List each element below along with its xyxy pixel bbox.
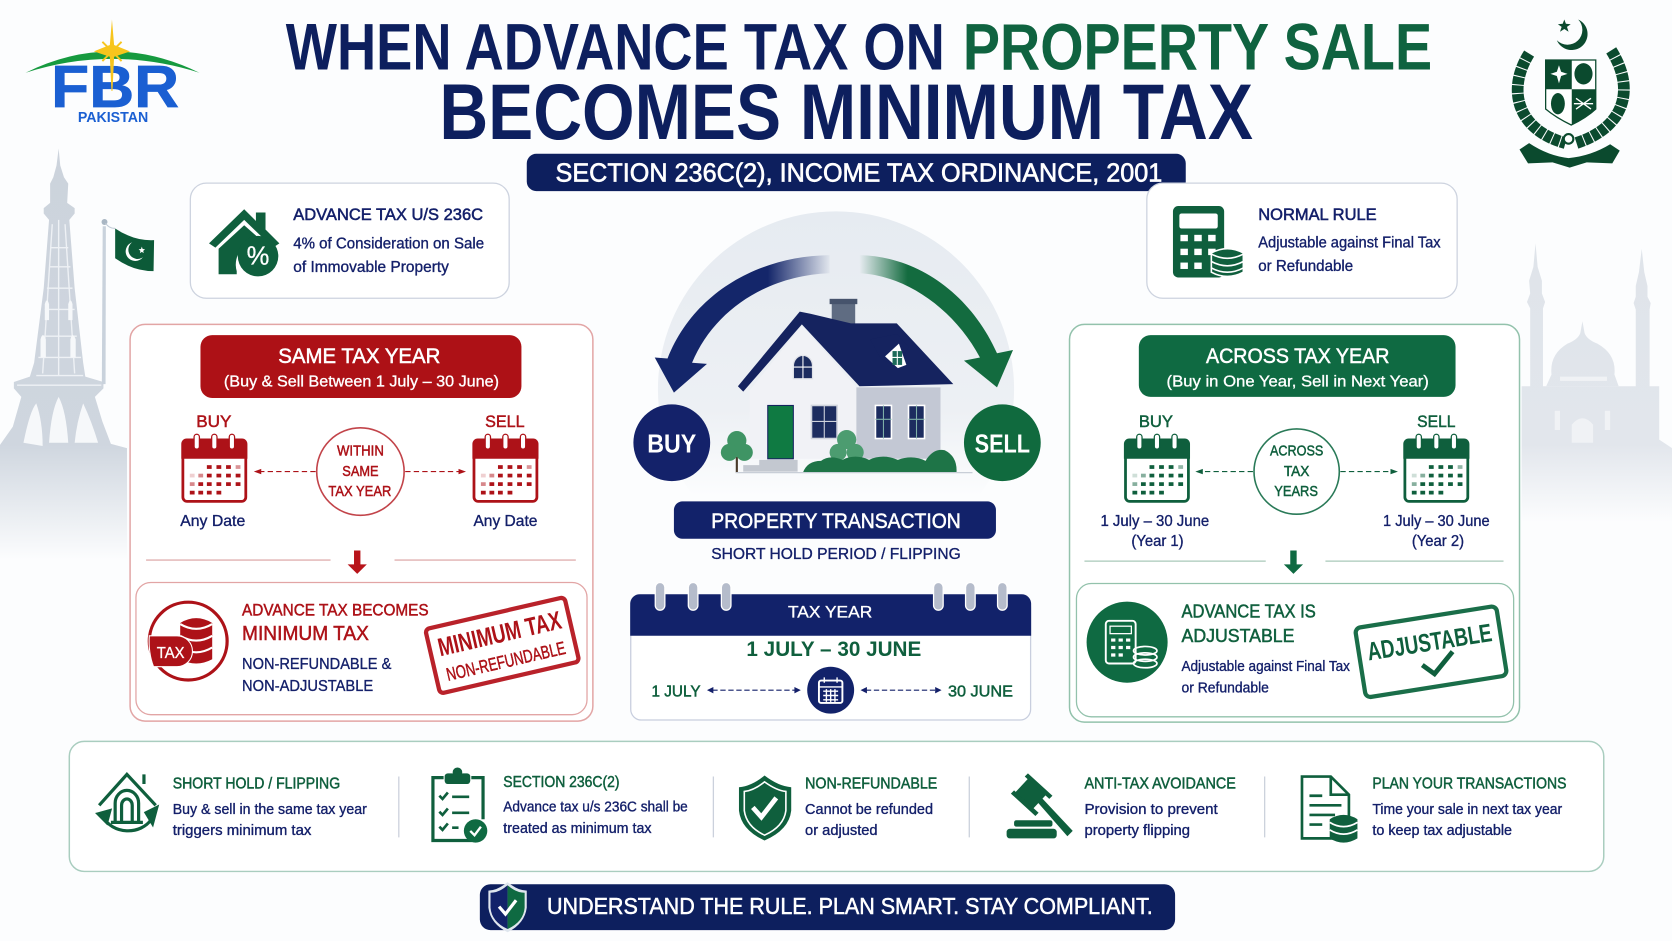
item: non-refundable: or adjusted bbox=[805, 823, 878, 839]
heading: across tax year bbox=[1139, 335, 1456, 397]
item: short hold / flipping bbox=[98, 774, 367, 839]
heading: same tax year bbox=[200, 335, 521, 398]
text: advance tax: 4% of Consideration on Sale bbox=[293, 236, 484, 253]
timeline arrows bbox=[707, 687, 942, 693]
item: short hold / flipping: Buy & sell in the same tax year bbox=[173, 802, 367, 818]
text: advance tax bbox=[293, 205, 484, 276]
buy date: BUY bbox=[196, 412, 231, 431]
item: anti-tax avoidance: property flipping bbox=[1084, 823, 1190, 839]
panel: tax year calendar bbox=[630, 582, 1031, 720]
item: short hold / flipping: SHORT HOLD / FLIPPING bbox=[173, 775, 340, 792]
badge: buy: BUY bbox=[647, 430, 696, 458]
icon: Pakistan flag on pole bbox=[102, 219, 154, 384]
house bbox=[721, 299, 972, 473]
sell date: SELL bbox=[485, 412, 525, 431]
icon: house with percent: % bbox=[247, 243, 269, 271]
item: anti-tax avoidance: Provision to prevent bbox=[1084, 802, 1218, 818]
text: advance tax: of Immovable Property bbox=[293, 259, 449, 276]
logo: FBR Pakistan: FBR bbox=[51, 53, 179, 120]
heading: across tax year: ACROSS TAX YEAR bbox=[1206, 344, 1389, 368]
panel: tax year calendar: 1 JULY bbox=[652, 684, 701, 701]
heading: same tax year: (Buy & Sell Between 1 July – 30 June) bbox=[224, 373, 499, 390]
badge: sell: SELL bbox=[975, 430, 1030, 458]
icon: calculator and coins bbox=[1173, 206, 1243, 277]
logo: FBR Pakistan bbox=[26, 19, 199, 126]
item: plan your transactions bbox=[1302, 775, 1566, 843]
item: section 236C(2) bbox=[433, 767, 688, 843]
badge: sell bbox=[964, 404, 1041, 481]
sell date bbox=[472, 412, 538, 530]
item: non-refundable bbox=[739, 775, 937, 841]
sell date: Any Date bbox=[473, 513, 538, 530]
item: plan your transactions: to keep tax adjustable bbox=[1372, 823, 1512, 839]
panel: tax year calendar: 1 JULY – 30 JUNE bbox=[746, 637, 921, 661]
arrow: left to buy bbox=[254, 469, 316, 474]
item: section 236C(2): Advance tax u/s 236C shall be bbox=[503, 800, 688, 816]
title bbox=[286, 11, 1432, 156]
icon: calendar circle bbox=[807, 667, 854, 714]
item: non-refundable: NON-REFUNDABLE bbox=[805, 775, 937, 792]
icon: tax coins bbox=[149, 602, 227, 680]
item: short hold / flipping: triggers minimum tax bbox=[173, 823, 312, 839]
icon: gavel bbox=[1007, 773, 1073, 838]
illustration: mosque silhouette bbox=[1522, 243, 1672, 523]
title: PROPERTY SALE bbox=[963, 11, 1432, 85]
across tax years circle: YEARS bbox=[1274, 483, 1318, 500]
item: section 236C(2): SECTION 236C(2) bbox=[503, 774, 620, 791]
arrow: down to result bbox=[348, 550, 367, 574]
icon: tax coins: TAX bbox=[157, 645, 185, 662]
stamp: adjustable: ADJUSTABLE bbox=[1365, 619, 1494, 666]
sell period: 1 July – 30 June bbox=[1383, 513, 1490, 530]
within same tax year circle: WITHIN bbox=[337, 443, 384, 460]
footer banner: UNDERSTAND THE RULE. PLAN SMART. STAY COMPLIANT. bbox=[547, 893, 1153, 919]
icon: document and coins bbox=[1302, 777, 1357, 843]
panel: same tax year bbox=[130, 324, 593, 721]
text: adjustable result: Adjustable against Final Tax bbox=[1181, 658, 1350, 675]
panel: key points strip bbox=[69, 741, 1604, 871]
item: non-refundable: Cannot be refunded bbox=[805, 802, 933, 818]
buy period bbox=[1100, 412, 1209, 550]
icon: shield with check bbox=[739, 775, 791, 841]
heading: across tax year: (Buy in One Year, Sell in Next Year) bbox=[1167, 373, 1429, 390]
buy date: Any Date bbox=[180, 513, 245, 530]
buy period: (Year 1) bbox=[1131, 533, 1184, 550]
item: plan your transactions: PLAN YOUR TRANSACTIONS bbox=[1372, 775, 1566, 792]
badge: buy bbox=[633, 404, 710, 481]
panel: tax year calendar: 30 JUNE bbox=[948, 684, 1013, 701]
emblem: state emblem of Pakistan bbox=[1518, 19, 1624, 168]
icon: checklist clipboard bbox=[433, 767, 487, 843]
icon: house with cycle arrows bbox=[98, 774, 157, 831]
text: normal rule: or Refundable bbox=[1258, 258, 1353, 275]
section badge: SECTION 236C(2), INCOME TAX ORDINANCE, 2001 bbox=[556, 160, 1162, 188]
result panel: minimum tax bbox=[136, 582, 587, 715]
result panel: adjustable bbox=[1076, 584, 1514, 717]
text: minimum tax result: NON-ADJUSTABLE bbox=[242, 678, 373, 695]
item: anti-tax avoidance bbox=[1007, 773, 1236, 839]
arrow: right to sell bbox=[1340, 469, 1398, 474]
heading: property transaction bbox=[674, 501, 996, 563]
logo: FBR Pakistan: PAKISTAN bbox=[78, 109, 148, 126]
buy date bbox=[180, 412, 247, 530]
sell period: SELL bbox=[1417, 412, 1456, 431]
footer banner bbox=[480, 882, 1175, 932]
text: adjustable result bbox=[1181, 602, 1350, 696]
icon: footer shield bbox=[488, 882, 527, 932]
arrow: sell bbox=[859, 255, 1013, 387]
icon: calculator coins bbox=[1087, 602, 1168, 683]
text: minimum tax result bbox=[242, 601, 429, 695]
within same tax year circle: TAX YEAR bbox=[328, 483, 392, 500]
item: anti-tax avoidance: ANTI-TAX AVOIDANCE bbox=[1084, 775, 1236, 792]
across tax years circle bbox=[1254, 429, 1339, 514]
icon: house with percent bbox=[209, 209, 279, 276]
heading: property transaction: PROPERTY TRANSACTION bbox=[711, 509, 961, 533]
item: plan your transactions: Time your sale in next tax year bbox=[1372, 802, 1562, 818]
within same tax year circle: SAME bbox=[342, 463, 379, 480]
text: normal rule bbox=[1258, 205, 1441, 275]
arrow: down to result bbox=[1284, 550, 1303, 574]
across tax years circle: TAX bbox=[1284, 463, 1309, 480]
arrow: right to sell bbox=[405, 469, 466, 474]
calendar rings bbox=[655, 582, 1007, 610]
panel: normal rule card bbox=[1147, 183, 1457, 298]
text: minimum tax result: MINIMUM TAX bbox=[242, 623, 369, 645]
stamp: minimum tax non-refundable: NON-REFUNDABLE bbox=[444, 638, 567, 685]
title: WHEN ADVANCE TAX ON bbox=[286, 11, 945, 85]
stamp: adjustable bbox=[1355, 606, 1507, 698]
arrow: left to buy bbox=[1195, 469, 1253, 474]
heading: property transaction: SHORT HOLD PERIOD / FLIPPING bbox=[711, 546, 961, 563]
text: normal rule: Adjustable against Final Tax bbox=[1258, 235, 1441, 252]
title: BECOMES MINIMUM TAX bbox=[439, 68, 1253, 156]
text: minimum tax result: NON-REFUNDABLE & bbox=[242, 656, 392, 673]
illustration: Minar-e-Pakistan tower bbox=[0, 148, 127, 560]
stamp: minimum tax non-refundable: MINIMUM TAX bbox=[435, 607, 564, 662]
stamp: minimum tax non-refundable bbox=[425, 597, 579, 694]
arrow: buy bbox=[655, 255, 830, 393]
sell period bbox=[1383, 412, 1490, 550]
panel: tax year calendar: TAX YEAR bbox=[788, 603, 872, 622]
text: normal rule: NORMAL RULE bbox=[1258, 205, 1377, 224]
text: adjustable result: ADVANCE TAX IS bbox=[1181, 602, 1316, 622]
across tax years circle: ACROSS bbox=[1270, 443, 1323, 460]
panel: advance tax card bbox=[190, 183, 509, 298]
heading: same tax year: SAME TAX YEAR bbox=[278, 344, 440, 368]
within same tax year circle bbox=[317, 428, 404, 515]
text: advance tax: ADVANCE TAX U/S 236C bbox=[293, 205, 483, 224]
illustration: house with buy and sell arrows bbox=[633, 211, 1041, 568]
buy period: BUY bbox=[1139, 412, 1173, 431]
text: minimum tax result: ADVANCE TAX BECOMES bbox=[242, 601, 429, 620]
item: section 236C(2): treated as minimum tax bbox=[503, 821, 652, 837]
text: adjustable result: ADJUSTABLE bbox=[1181, 626, 1295, 646]
panel: across tax year bbox=[1070, 324, 1520, 722]
text: adjustable result: or Refundable bbox=[1181, 679, 1269, 696]
buy period: 1 July – 30 June bbox=[1100, 513, 1209, 530]
sell period: (Year 2) bbox=[1412, 533, 1464, 550]
